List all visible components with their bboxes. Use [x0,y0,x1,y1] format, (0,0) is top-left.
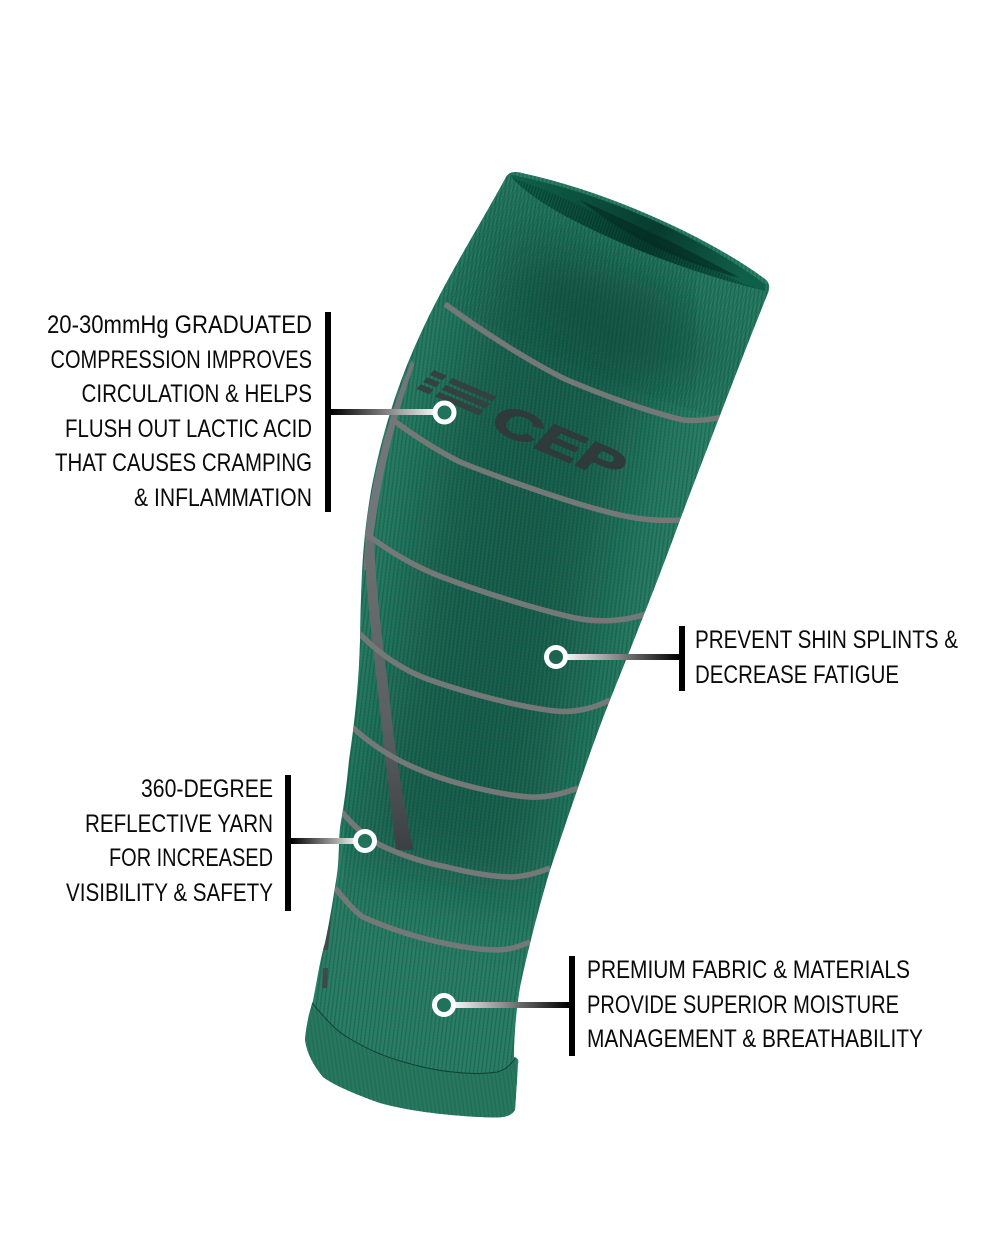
text block [66,775,273,907]
text block: PROVIDE SUPERIOR MOISTURE [587,991,899,1019]
text block [47,311,312,512]
central shading [440,260,600,880]
sleeve opening [512,175,766,291]
leader line [291,838,365,844]
text block: FLUSH OUT LACTIC ACID [65,415,312,443]
text block: REFLECTIVE YARN [85,810,273,838]
text block: PREMIUM FABRIC & MATERIALS [587,956,910,984]
marker ring [356,832,374,850]
brand logo: CEP [486,393,633,491]
bar [325,312,331,512]
callout: reflective yarn [66,775,374,911]
text block: COMPRESSION IMPROVES [50,346,312,374]
ribbed top band [444,172,769,418]
text block: CIRCULATION & HELPS [82,380,312,408]
calf sleeve product [300,165,780,1125]
bar [679,626,685,691]
text block: 360-DEGREE [141,775,273,803]
reflective stripes [335,304,722,950]
bar [569,956,575,1056]
bar [285,775,291,911]
bottom cuff [300,1003,520,1120]
brand logo [410,361,633,491]
text block: THAT CAUSES CRAMPING [55,449,312,477]
text block [587,956,923,1053]
small ankle mark [322,903,332,988]
grey side panel [364,360,414,570]
infographic [48,172,958,1118]
marker ring [434,996,454,1014]
text block [695,626,958,689]
callout: premium fabric [434,956,923,1056]
text block: 20-30mmHg GRADUATED [47,311,312,339]
callout: shin splints [546,626,958,691]
marker ring [546,648,566,666]
marker ring [435,403,454,422]
leader line [331,409,445,415]
sleeve body [305,172,769,1117]
text block: DECREASE FATIGUE [695,661,899,689]
callout: graduated compression [47,311,454,512]
text block: MANAGEMENT & BREATHABILITY [587,1025,923,1053]
text block: VISIBILITY & SAFETY [66,879,273,907]
leader line [444,1002,569,1008]
leader line [556,654,679,660]
dark side panel [365,540,414,850]
text block: & INFLAMMATION [134,484,312,512]
text block: FOR INCREASED [109,844,273,872]
